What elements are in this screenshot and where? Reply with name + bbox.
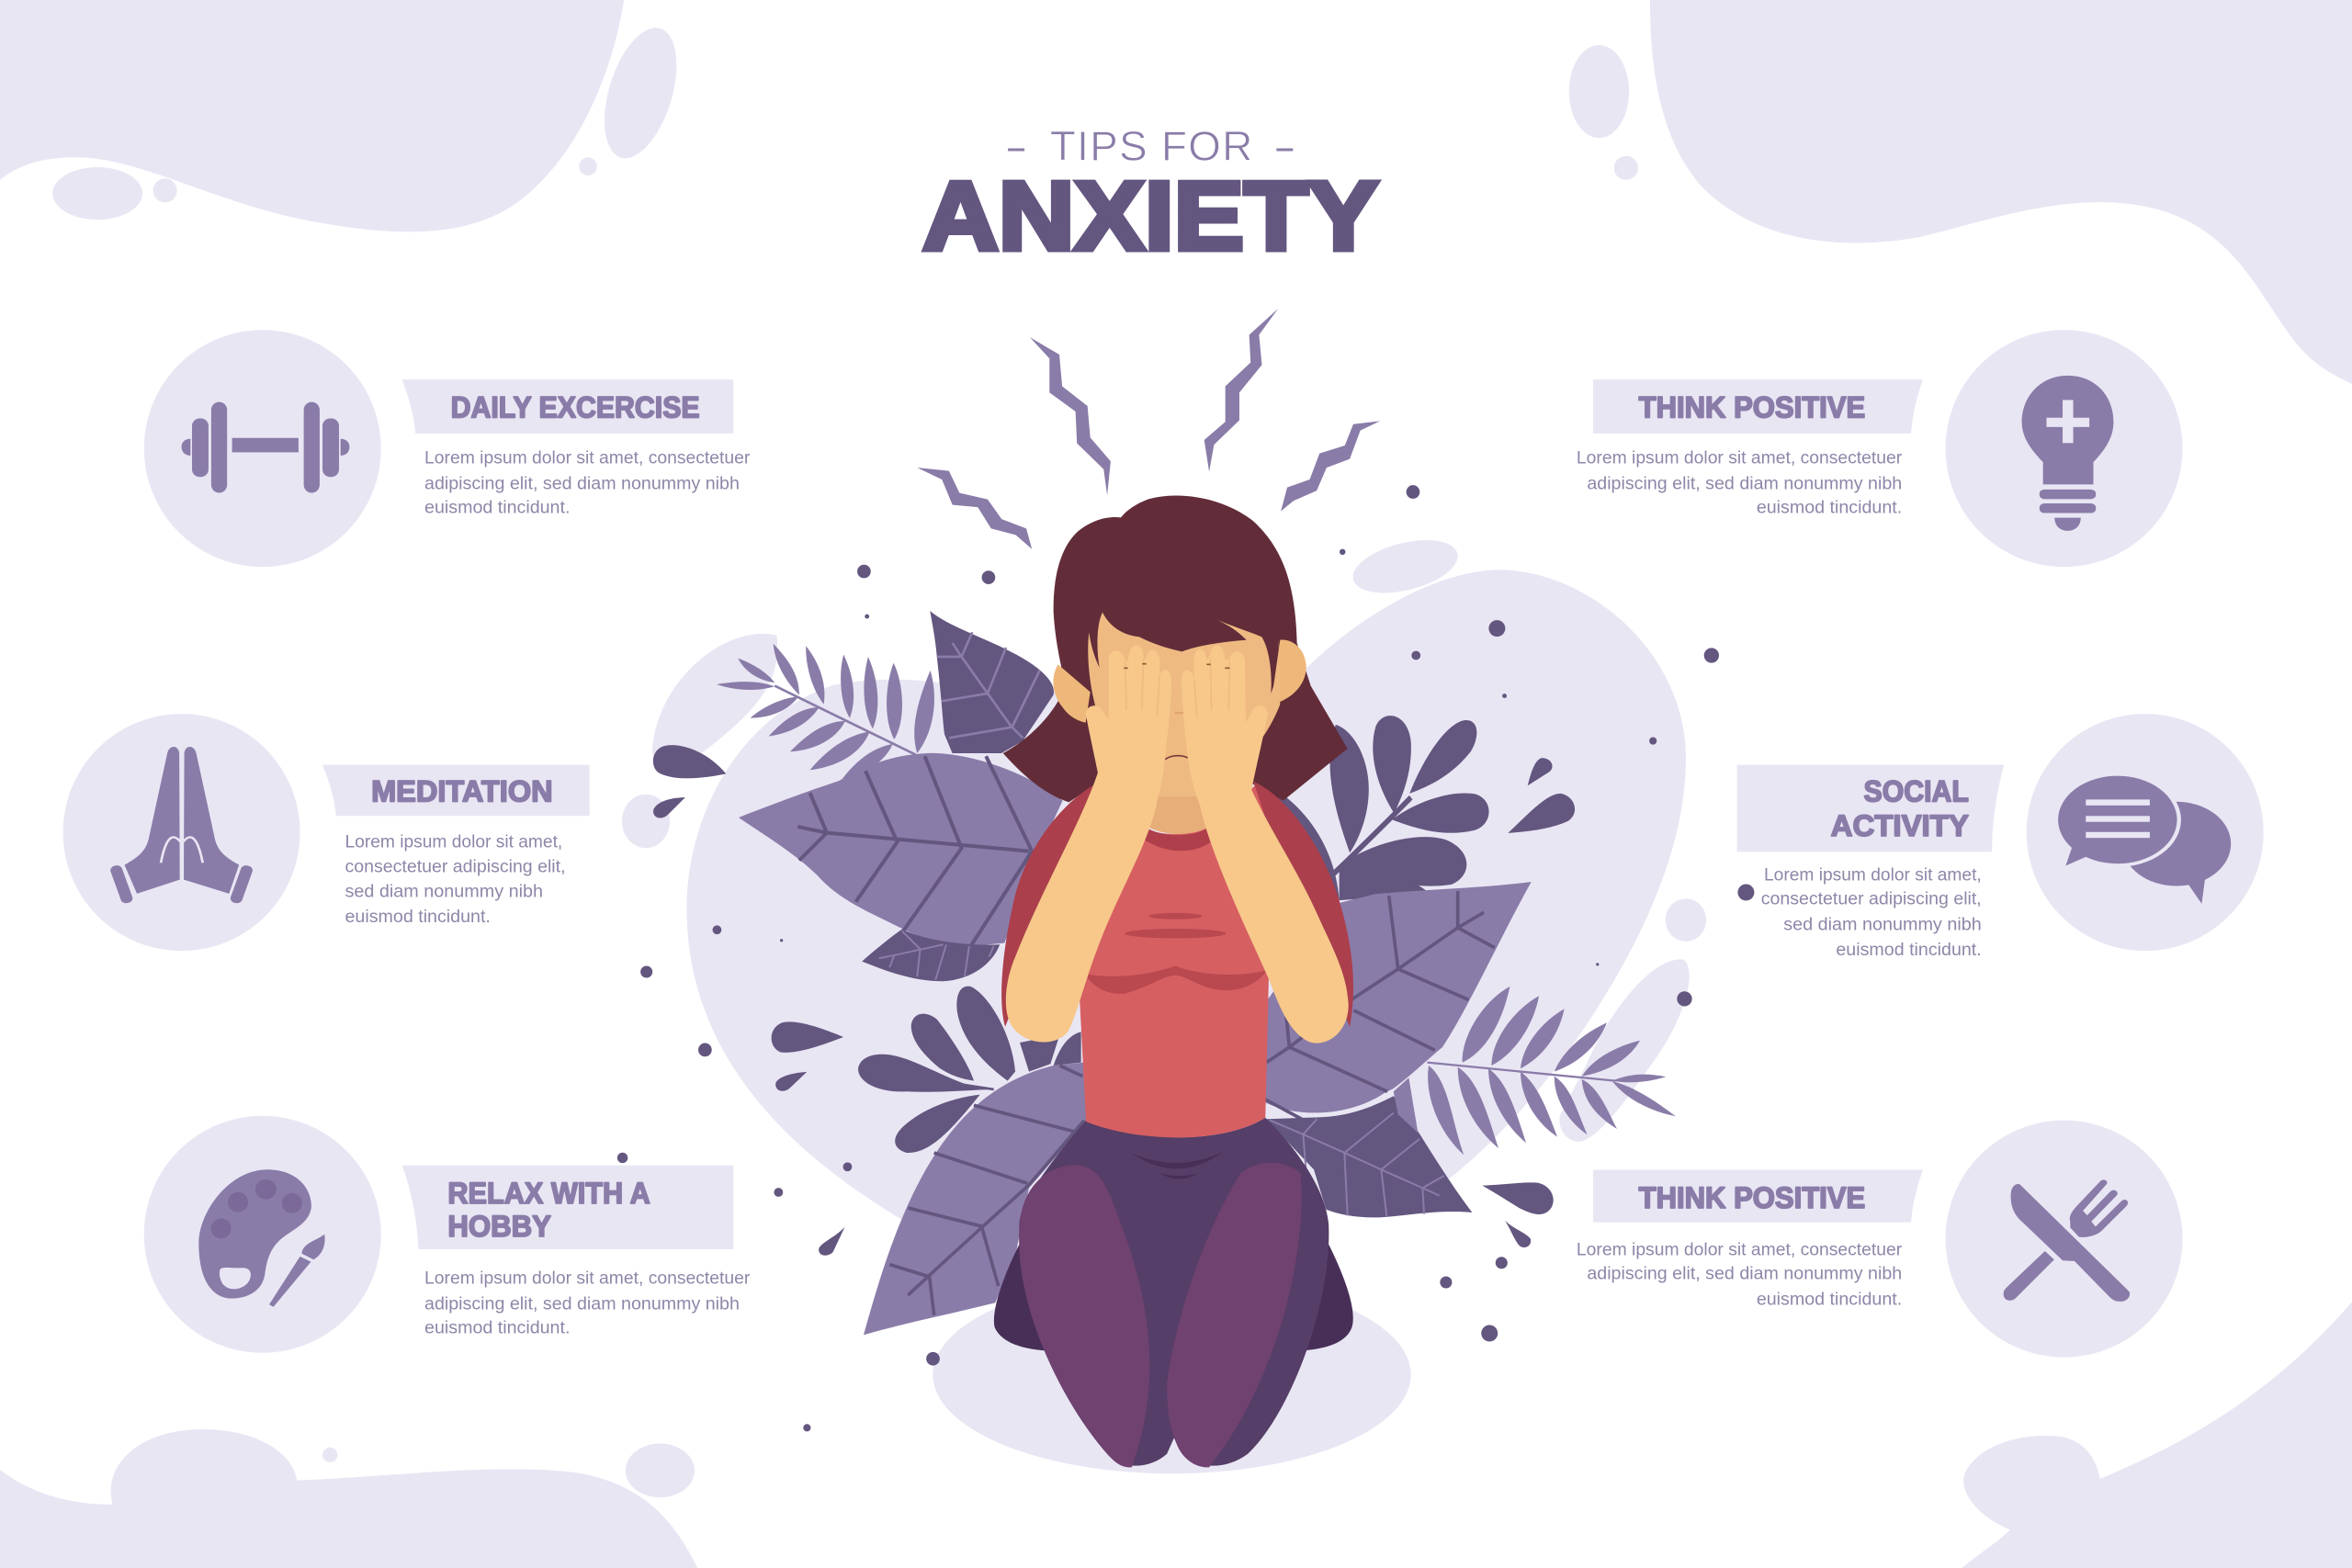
icon: knife and fork <box>1946 1121 2183 1358</box>
body text: adipiscing elit, sed diam nonummy nibh <box>1587 1265 1902 1284</box>
blob: central backdrop <box>622 531 1706 1473</box>
panel: relax with a hobby <box>144 1116 751 1353</box>
hair back <box>1003 495 1348 802</box>
fern: upper left <box>717 644 934 779</box>
stress bolts <box>917 309 1380 549</box>
head <box>1053 613 1306 851</box>
background blob: bottom left <box>0 1429 697 1568</box>
background blob: bottom right <box>1962 1302 2352 1568</box>
body text: consectetuer adipiscing elit, <box>345 857 566 876</box>
heading: DAILY EXCERCISE <box>451 390 700 424</box>
body text: adipiscing elit, sed diam nonummy nibh <box>424 474 740 493</box>
heading: MEDITATION <box>371 774 553 808</box>
heading <box>447 1176 650 1243</box>
legs <box>994 1118 1353 1467</box>
body text: adipiscing elit, sed diam nonummy nibh <box>1587 474 1902 493</box>
arms <box>1006 758 1349 1043</box>
heading: RELAX WITH A <box>447 1176 650 1210</box>
title: ANXIETY <box>922 162 1378 270</box>
icon: praying hands <box>63 714 300 951</box>
panel: meditation <box>63 714 590 951</box>
leaf: dark lower right <box>1266 1096 1472 1217</box>
banner <box>1593 379 1923 434</box>
body text: adipiscing elit, sed diam nonummy nibh <box>424 1294 740 1314</box>
body text: euismod tincidunt. <box>1836 941 1982 960</box>
banner <box>1593 1170 1923 1223</box>
central illustration <box>622 309 1706 1473</box>
banner <box>1737 765 2004 852</box>
body text: sed diam nonummy nibh <box>345 882 543 901</box>
drops: lower right <box>1482 1182 1554 1247</box>
panel: social activity <box>1737 714 2264 960</box>
icon: light bulb <box>1946 330 2183 567</box>
body text: Lorem ipsum dolor sit amet, consectetuer <box>424 449 751 468</box>
shirt <box>1001 782 1353 1137</box>
body text: euismod tincidunt. <box>1757 1290 1902 1309</box>
body text: Lorem ipsum dolor sit amet, consectetuer <box>424 1269 751 1289</box>
leaf: big light left <box>739 753 1063 946</box>
body text: Lorem ipsum dolor sit amet, <box>1764 865 1982 885</box>
leaf: big light right <box>1265 882 1532 1133</box>
title: TIPS FOR <box>1050 123 1252 170</box>
body text: euismod tincidunt. <box>1757 498 1902 517</box>
panel: think positive <box>1577 330 2183 567</box>
heading <box>1831 774 1969 842</box>
hands <box>1086 646 1268 815</box>
icon: dumbbell <box>144 330 381 567</box>
body text: Lorem ipsum dolor sit amet, consectetuer <box>1577 1241 1903 1260</box>
panel: think positive (cutlery) <box>1577 1121 2183 1358</box>
body text <box>424 1269 751 1337</box>
heading: SOCIAL <box>1864 774 1969 808</box>
branch: dark left <box>858 987 1081 1153</box>
woman <box>994 495 1353 1467</box>
icon: chat bubbles <box>2027 714 2264 951</box>
body text: Lorem ipsum dolor sit amet, consectetuer <box>1577 449 1903 468</box>
body text <box>1577 449 1903 517</box>
fern: lower right <box>1427 987 1676 1155</box>
leaf: small dark left <box>862 930 1000 981</box>
body text <box>345 832 566 927</box>
scattered dots <box>617 485 1754 1431</box>
body text: euismod tincidunt. <box>424 1318 570 1337</box>
body text: sed diam nonummy nibh <box>1783 915 1982 934</box>
leaf: dark upper left <box>930 611 1054 753</box>
leaf: big light lower left <box>864 1063 1087 1335</box>
body text <box>1761 865 1982 960</box>
heading: ACTIVITY <box>1831 808 1969 842</box>
body text: Lorem ipsum dolor sit amet, <box>345 832 562 852</box>
body text <box>424 449 751 517</box>
banner <box>402 1166 733 1249</box>
panel: daily excercise <box>144 330 751 567</box>
drops <box>653 745 1575 1256</box>
body text: euismod tincidunt. <box>345 908 491 927</box>
body text: consectetuer adipiscing elit, <box>1761 890 1982 909</box>
background blob: top left <box>0 0 690 231</box>
heading: THINK POSITIVE <box>1639 1180 1865 1214</box>
icon: palette and brush <box>144 1116 381 1353</box>
banner <box>402 379 733 434</box>
body text <box>1577 1241 1903 1309</box>
heading: THINK POSITIVE <box>1639 390 1865 424</box>
title: – <box>1276 125 1294 170</box>
body text: euismod tincidunt. <box>424 498 570 517</box>
background blob: top right <box>1569 0 2352 384</box>
title: – <box>1008 125 1024 170</box>
title <box>922 123 1378 270</box>
heading: HOBBY <box>447 1209 551 1243</box>
banner <box>322 765 590 816</box>
branch: dark right <box>1276 716 1489 900</box>
